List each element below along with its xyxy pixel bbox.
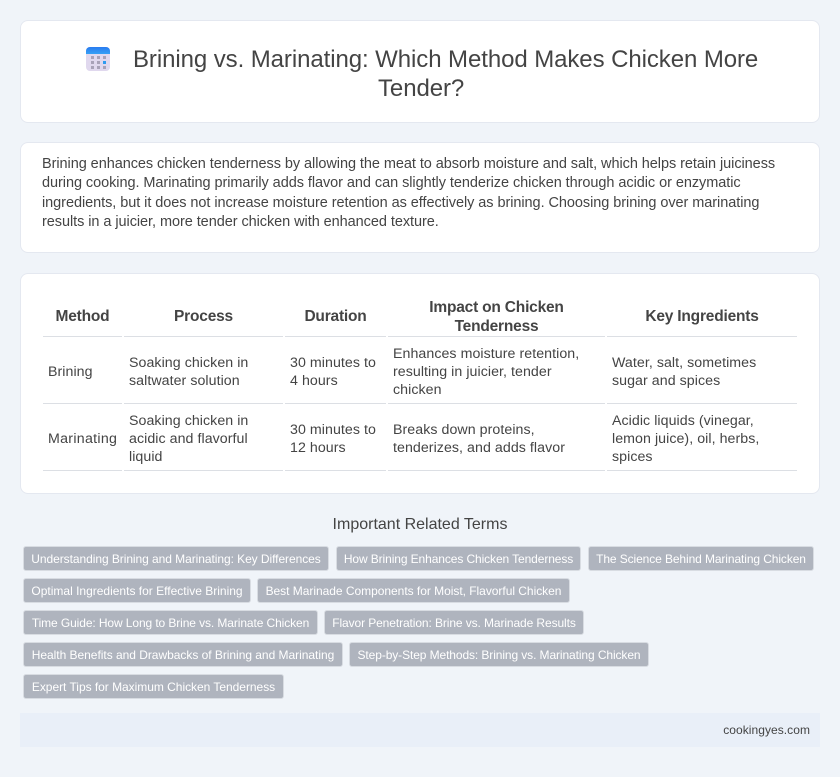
intro paragraph: results in a juicier, more tender chicken with enhanced texture.: [42, 214, 439, 230]
related terms tags: Step-by-Step Methods: Brining vs. Marinating Chicken: [358, 648, 640, 662]
row: marinating: Marinating: [48, 431, 117, 447]
table header: Duration: [304, 308, 367, 325]
row: brining: 4 hours: [290, 373, 338, 389]
row: marinating: Breaks down proteins,: [393, 422, 535, 438]
row: brining: chicken: [393, 382, 442, 398]
row: brining: Enhances moisture retention,: [393, 346, 579, 362]
related terms tags: Expert Tips for Maximum Chicken Tenderness: [32, 680, 275, 694]
row: brining: 30 minutes to: [290, 355, 376, 371]
footer source: cookingyes.com: [723, 723, 810, 737]
related terms tags: Flavor Penetration: Brine vs. Marinade Results: [332, 616, 576, 630]
related terms tags: Optimal Ingredients for Effective Brining: [31, 584, 243, 598]
row: marinating: acidic and flavorful: [129, 431, 248, 447]
row: marinating: [48, 413, 759, 465]
row: brining: [48, 346, 756, 398]
row: brining: sugar and spices: [612, 373, 720, 389]
intro paragraph: ingredients, but it does not increase moisture retention as effectively as brining. Choosing brining over marinating: [42, 195, 759, 211]
row: marinating: 30 minutes to: [290, 422, 376, 438]
related terms heading: Important Related Terms: [333, 516, 507, 533]
row: brining: resulting in juicier, tender: [393, 364, 552, 380]
row: marinating: lemon juice), oil, herbs,: [612, 431, 759, 447]
row: marinating: Acidic liquids (vinegar,: [612, 413, 754, 429]
row: marinating: 12 hours: [290, 440, 346, 456]
row: brining: Soaking chicken in: [129, 355, 248, 371]
related terms tags: Understanding Brining and Marinating: Key Differences: [31, 552, 321, 566]
related terms tags: Best Marinade Components for Moist, Flavorful Chicken: [266, 584, 561, 598]
row: brining: Water, salt, sometimes: [612, 355, 756, 371]
table header: Method: [56, 308, 109, 325]
table header: Key Ingredients: [645, 308, 759, 325]
table header: Tenderness: [455, 318, 538, 335]
header panel: [20, 20, 820, 123]
row: marinating: Soaking chicken in: [129, 413, 248, 429]
footer bar: [20, 713, 820, 747]
related terms tags: The Science Behind Marinating Chicken: [596, 552, 806, 566]
comparison table panel: [20, 273, 820, 494]
title: Tender?: [378, 75, 464, 102]
row: marinating: tenderizes, and adds flavor: [393, 440, 565, 456]
related terms tags: Health Benefits and Drawbacks of Brining and Marinating: [32, 648, 334, 662]
related terms tags: Time Guide: How Long to Brine vs. Marinate Chicken: [32, 616, 309, 630]
table header: Process: [174, 308, 233, 325]
related terms tags: How Brining Enhances Chicken Tenderness: [344, 552, 573, 566]
related terms tags: [23, 546, 814, 699]
intro paragraph: during cooking. Marinating primarily adds flavor and can slightly tenderize chicken through acidic or enzymatic: [42, 175, 741, 191]
title: Brining vs. Marinating: Which Method Makes Chicken More: [133, 46, 758, 73]
row: brining: saltwater solution: [129, 373, 240, 389]
title: [133, 46, 758, 102]
intro paragraph: Brining enhances chicken tenderness by allowing the meat to absorb moisture and salt, which helps retain juiciness: [42, 156, 775, 172]
row: marinating: liquid: [129, 449, 162, 465]
row: brining: Brining: [48, 364, 93, 380]
table header: Impact on Chicken: [429, 299, 564, 316]
icon: calendar: [86, 47, 110, 71]
row: marinating: spices: [612, 449, 653, 465]
intro text panel: [20, 142, 820, 253]
intro paragraph: [42, 156, 775, 230]
table header: [56, 299, 759, 335]
